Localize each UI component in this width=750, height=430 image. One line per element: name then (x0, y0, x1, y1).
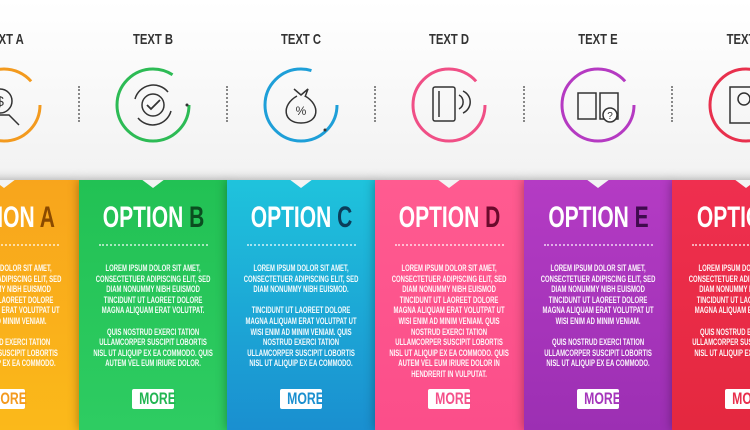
icon: report chart (708, 68, 750, 142)
icon: money bag percent (264, 68, 338, 142)
icon: dollar exchange (0, 68, 42, 142)
panel: option A (0, 180, 79, 430)
icon: credit card contactless (412, 68, 486, 142)
panel: option B: QUIS NOSTRUD EXERCI TATION ULLAMCORPER SUSCIPIT LOBORTIS NISL UT ALIQUIP EX EA COMMODO. QUIS AUTEM VEL EUM IRIURE DOLOR. (93, 327, 213, 368)
icon: refresh check (116, 68, 190, 142)
heading: text B: TEXT B (133, 31, 173, 48)
panel: option C: LOREM IPSUM DOLOR SIT AMET, CONSECTETUER ADIPISCING ELIT, SED DIAM NONUMMY NIBH EUISMOD. (244, 263, 358, 294)
panel: option E: OPTION E (548, 201, 649, 234)
panel: option B: MORE (139, 389, 176, 408)
panel: option D: OPTION D (399, 201, 500, 234)
panel: option E: LOREM IPSUM DOLOR SIT AMET, CONSECTETUER ADIPISCING ELIT, SED DIAM NONUMMY NIBH EUISMOD TINCIDUNT UT LAOREET DOLORE MAGNA ALIQUAM ERAT VOLUTPAT UT WISI ENIM AD MINIM VENIAM. (541, 263, 655, 326)
panel: option C: OPTION C (251, 201, 352, 234)
panel: option D (375, 180, 524, 430)
heading: text D: TEXT D (429, 31, 469, 48)
panel: option B (79, 180, 228, 430)
panel: option F (672, 180, 750, 430)
panel: option D: LOREM IPSUM DOLOR SIT AMET, CONSECTETUER ADIPISCING ELIT, SED DIAM NONUMMY NIBH EUISMOD TINCIDUNT UT LAOREET DOLORE MAGNA ALIQUAM ERAT VOLUTPAT UT WISI ENIM AD MINIM VENIAM. QUIS NOSTRUD EXERCI TATION ULLAMCORPER SUSCIPIT LOBORTIS NISL UT ALIQUIP EX EA COMMODO. QUIS AUTEM VEL EUM IRIURE DOLOR IN HENDRERIT IN VULPUTAT. (389, 263, 509, 379)
icon: book question (560, 68, 636, 142)
icon: money bag percent: % (296, 104, 307, 118)
icon: book question: ? (607, 111, 613, 122)
panel: option E (524, 180, 673, 430)
panel: option B: LOREM IPSUM DOLOR SIT AMET, CONSECTETUER ADIPISCING ELIT, SED DIAM NONUMMY NIBH EUISMOD TINCIDUNT UT LAOREET DOLORE MAGNA ALIQUAM ERAT VOLUTPAT. (96, 263, 210, 315)
panel: option E: MORE (584, 389, 621, 408)
panel: option E: QUIS NOSTRUD EXERCI TATION ULLAMCORPER SUSCIPIT LOBORTIS NISL UT ALIQUIP EX EA COMMODO. (544, 337, 652, 368)
panel: option C (227, 180, 376, 430)
panel: option B: OPTION B (103, 201, 204, 234)
panel: option C: TINCIDUNT UT LAOREET DOLORE MAGNA ALIQUAM ERAT VOLUTPAT UT WISI ENIM AD MINIM VENIAM. QUIS NOSTRUD EXERCI TATION ULLAMCORPER SUSCIPIT LOBORTIS NISL UT ALIQUIP EX EA COMMODO. (246, 305, 357, 368)
panel: option D: MORE (435, 389, 472, 408)
heading: text E: TEXT E (578, 31, 618, 48)
heading: text C: TEXT C (281, 31, 321, 48)
panel: option C: MORE (287, 389, 324, 408)
